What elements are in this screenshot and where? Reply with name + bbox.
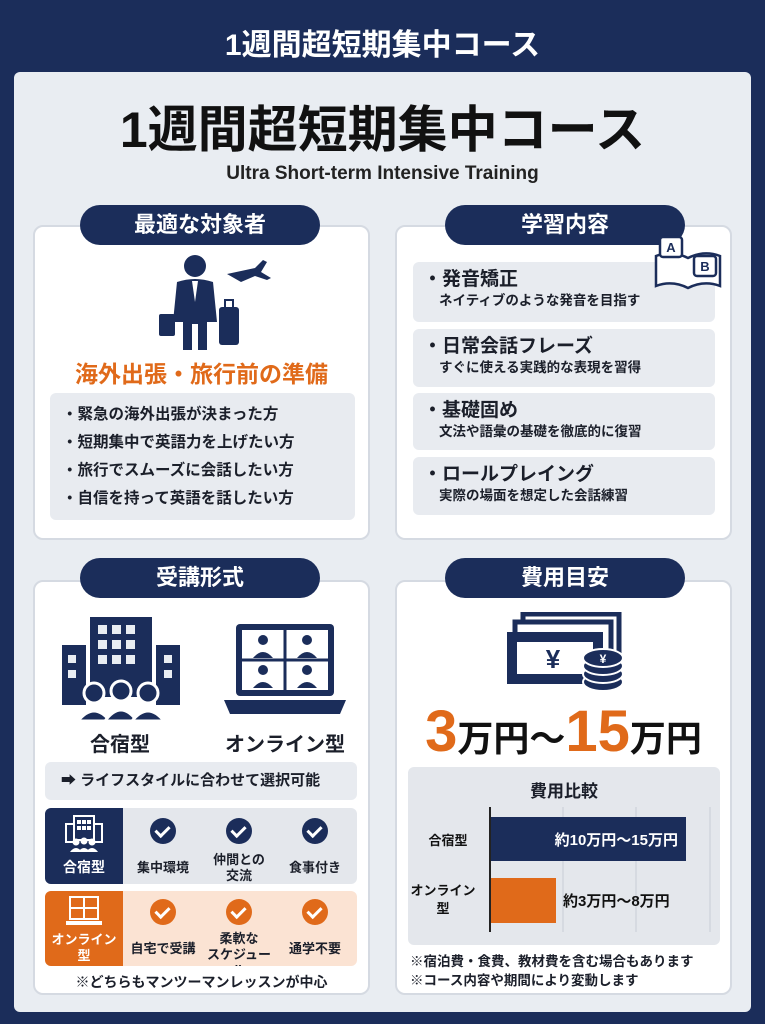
pill: content: 学習内容 (521, 212, 609, 237)
pill: format (80, 558, 320, 598)
table row: online (45, 891, 357, 966)
cell: peers: 仲間との (213, 852, 265, 867)
cell: concentration (137, 818, 189, 875)
icon: money (507, 612, 622, 690)
row header orange: オンライン (51, 932, 116, 947)
cell: meals (289, 818, 341, 875)
cell: meals: 食事付き (289, 860, 341, 875)
list: target bullets: ・緊急の海外出張が決まった方 (62, 406, 278, 423)
item: basics (413, 393, 715, 450)
chart: cost comparison: 合宿型 (428, 833, 468, 848)
pill: format: 受講形式 (156, 565, 244, 590)
note: lifestyle arrow: ➡ ライフスタイルに合わせて選択可能 (61, 772, 320, 789)
pill: target: 最適な対象者 (134, 212, 266, 237)
cell: peers: 交流 (226, 868, 252, 883)
table row: gasshuku (45, 808, 357, 884)
panel: target audience (33, 225, 370, 540)
row header navy (45, 808, 123, 884)
cell: flexible: 柔軟な (219, 931, 258, 946)
label: online: オンライン型 (225, 734, 345, 756)
price range: 3万円～15万円 (425, 699, 702, 764)
item: roleplay (413, 457, 715, 515)
item: pronunciation: ネイティブのような発音を目指す (439, 293, 640, 308)
heading: orange: 海外出張・旅行前の準備 (75, 361, 328, 387)
chart: cost comparison: 型 (436, 901, 450, 916)
icon: money: ¥ (546, 644, 561, 674)
list: target bullets: ・旅行でスムーズに会話したい方 (62, 462, 294, 479)
icon: book AB: A (666, 240, 676, 255)
label: gasshuku: 合宿型 (90, 734, 150, 756)
cell: flexible (207, 899, 271, 966)
item: pronunciation (413, 262, 715, 322)
item: basics: ・基礎固め (423, 400, 518, 421)
header band title: 1週間超短期集中コース (225, 29, 540, 62)
chart: cost comparison: 費用比較 (530, 782, 598, 801)
item: phrases (413, 329, 715, 387)
notes: cost: ※コース内容や期間により変動します (410, 973, 639, 988)
cell: concentration: 集中環境 (137, 860, 189, 875)
item: phrases: すぐに使える実践的な表現を習得 (439, 360, 641, 375)
icon: laptop video (224, 624, 346, 714)
item: phrases: ・日常会話フレーズ (423, 336, 593, 357)
pill: cost (445, 558, 685, 598)
row header orange (45, 891, 123, 966)
main title: 1週間超短期集中コース (120, 102, 645, 158)
cell: peers (213, 818, 265, 883)
list: target bullets: ・短期集中で英語力を上げたい方 (62, 434, 295, 451)
icon: book AB (654, 236, 722, 290)
item: roleplay: 実際の場面を想定した会話練習 (439, 488, 628, 503)
row header navy: 合宿型 (63, 859, 105, 875)
chart: cost comparison: 約3万円～8万円 (563, 893, 670, 910)
panel: content (395, 225, 732, 540)
panel: cost (395, 580, 732, 995)
item: pronunciation: ・発音矯正 (423, 269, 518, 290)
pill: target (80, 205, 320, 245)
panel: format (33, 580, 370, 995)
item: roleplay: ・ロールプレイング (423, 464, 594, 485)
icon: building (62, 617, 180, 720)
icon: money: ¥ (600, 652, 607, 666)
pill: cost: 費用目安 (521, 565, 609, 590)
notes: cost (410, 954, 694, 988)
cell: home: 自宅で受講 (130, 941, 196, 956)
icon: businessman (159, 255, 271, 350)
chart: cost comparison: 約10万円～15万円 (555, 832, 678, 849)
cell: home (130, 899, 196, 956)
cell: no commute (289, 899, 341, 956)
notes: cost: ※宿泊費・食費、教材費を含む場合もあります (410, 954, 694, 969)
note: man-to-man: ※どちらもマンツーマンレッスンが中心 (76, 974, 328, 990)
chart: cost comparison: オンライン (410, 883, 476, 898)
subtitle: Ultra Short-term Intensive Training (226, 163, 539, 184)
row header orange: 型 (77, 948, 90, 963)
list: target bullets (50, 393, 355, 520)
pill: content (445, 205, 685, 245)
list: target bullets: ・自信を持って英語を話したい方 (62, 490, 294, 507)
chart: cost comparison (408, 767, 720, 945)
icon: book AB: B (700, 259, 710, 274)
cell: no commute: 通学不要 (289, 941, 341, 956)
item: basics: 文法や語彙の基礎を徹底的に復習 (439, 424, 642, 439)
note: lifestyle arrow (45, 762, 357, 800)
